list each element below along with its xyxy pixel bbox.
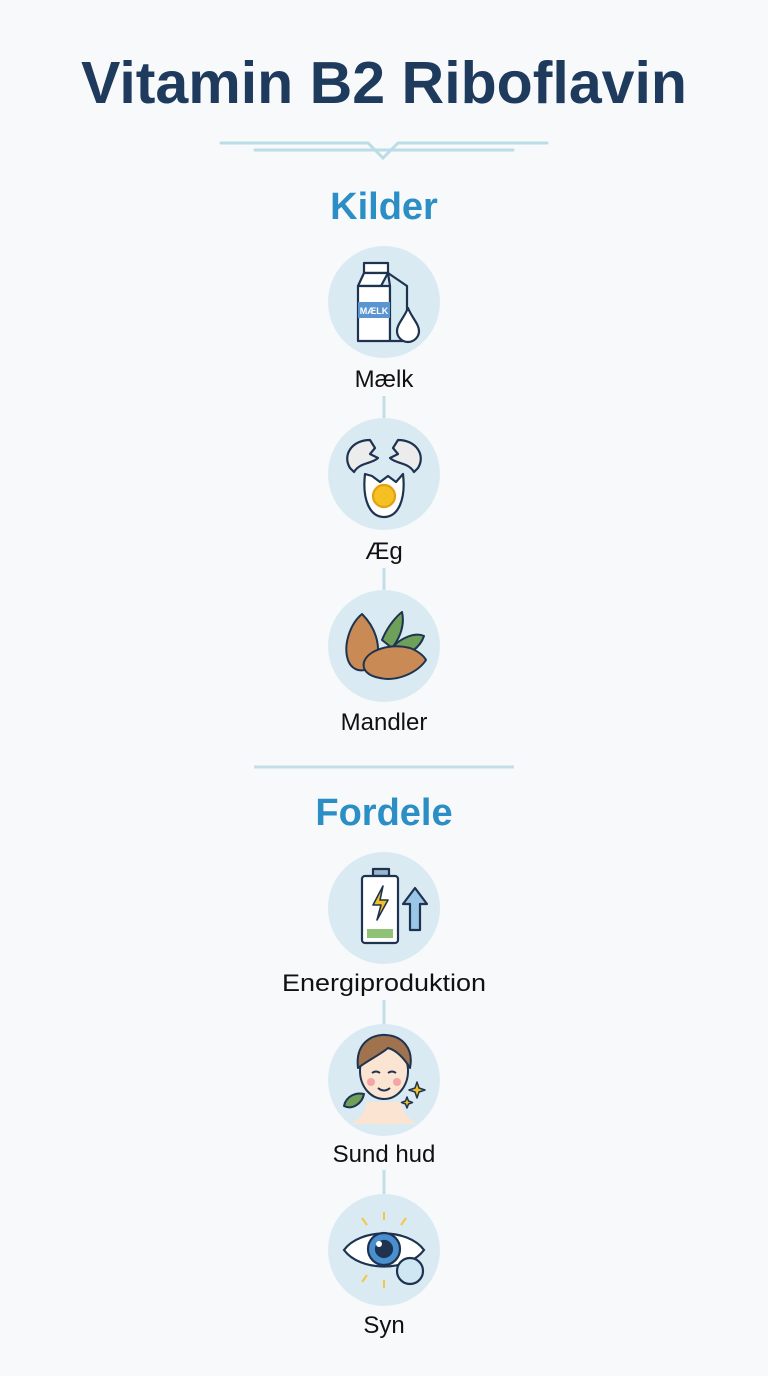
item: Mandler: Mandler	[341, 709, 427, 736]
icon: face	[344, 1035, 425, 1124]
item: Energiproduktion: Energiproduktion	[282, 970, 486, 997]
icon: milk carton: MÆLK	[360, 306, 389, 316]
item: Mandler	[328, 590, 440, 736]
item: Mælk: Mælk	[355, 366, 414, 393]
icon: eye	[344, 1212, 424, 1288]
item: Sund hud	[328, 1024, 440, 1168]
icon: milk carton	[358, 263, 419, 342]
icon: almonds	[346, 612, 426, 679]
item: Energiproduktion	[282, 852, 486, 997]
heading: Kilder: Kilder	[330, 186, 438, 228]
title: Vitamin B2 Riboflavin	[81, 50, 687, 116]
icon: egg	[347, 440, 421, 517]
item: Æg	[328, 418, 440, 565]
item: Syn: Syn	[363, 1312, 405, 1339]
item: Syn	[328, 1194, 440, 1339]
item: Æg: Æg	[365, 538, 403, 565]
icon: battery	[362, 869, 427, 943]
item: Sund hud: Sund hud	[333, 1141, 435, 1168]
item: Mælk	[328, 246, 440, 393]
heading: Fordele: Fordele	[315, 792, 453, 834]
